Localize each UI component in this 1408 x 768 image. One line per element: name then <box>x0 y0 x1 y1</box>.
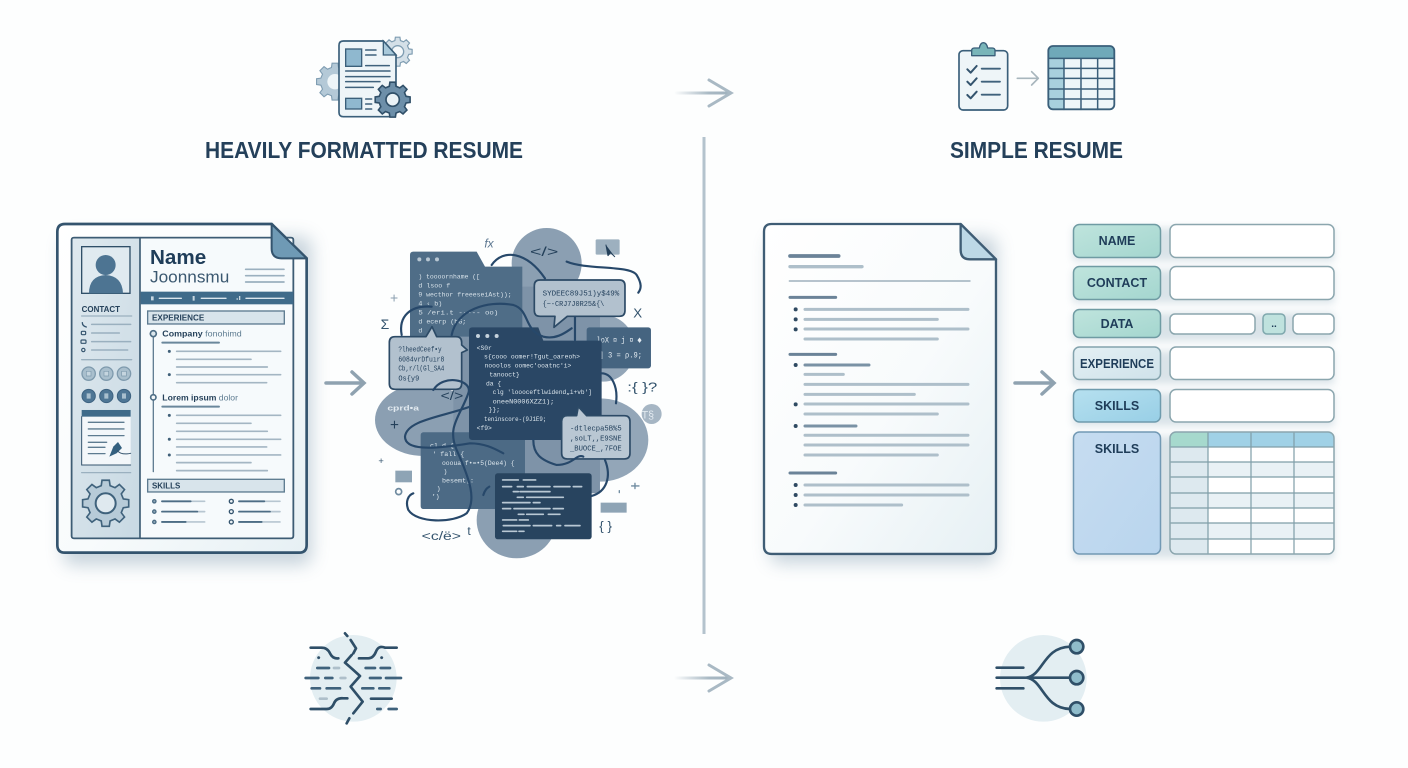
row: experience: EXPERIENCE <box>1080 357 1154 371</box>
code window: top left: d ecerp (bG; <box>418 317 466 325</box>
skill bars <box>153 499 280 524</box>
speech bubble: lower right: ,soLT‚,E9SNE <box>570 436 622 444</box>
blobs <box>375 228 662 558</box>
code window: centre: tanooct} <box>489 372 520 379</box>
heading lines <box>789 256 970 281</box>
contact list <box>81 323 131 352</box>
gear icon <box>83 480 129 526</box>
code window: bottom left: ) <box>437 485 441 493</box>
icon: checklist to table <box>959 43 1114 110</box>
speech bubble: top right <box>534 280 625 327</box>
contact band <box>141 292 293 304</box>
code window: top left: 4 ‹ b) <box>418 299 442 307</box>
tangled connector lines <box>401 255 641 520</box>
title: simple resume: SIMPLE RESUME <box>950 137 1123 163</box>
icon: document with gears <box>317 37 412 117</box>
code window: centre: }}; <box>489 407 500 414</box>
skills heading: SKILLS <box>152 481 181 491</box>
speech bubble: lower right: -dtlecpa5B%5 <box>570 426 622 434</box>
code window: bottom left: ’) <box>432 493 440 501</box>
experience heading: EXPERIENCE <box>152 313 205 323</box>
stray code symbols: </> <box>441 388 464 403</box>
code window: centre: da { <box>486 381 501 388</box>
icon: broken data lines <box>306 633 401 723</box>
stray code symbols: Σ <box>381 316 390 332</box>
name heading: Name <box>150 246 206 269</box>
code window: bottom left: ' fall { <box>432 450 464 458</box>
code window: top left: ) toooornhame ([ <box>418 272 480 280</box>
fold corner <box>272 224 307 258</box>
panel: simple resume document <box>764 224 997 563</box>
panel: tangled code chaos <box>375 228 662 558</box>
subtitle: Joonnsmu <box>150 268 229 286</box>
row: skills block label <box>1074 432 1160 554</box>
row: data <box>1074 310 1334 338</box>
row: experience <box>1074 347 1334 380</box>
row: contact: CONTACT <box>1087 276 1147 290</box>
section: summary bullets <box>790 297 968 339</box>
section: skills bullets <box>790 473 968 507</box>
code window: top left: d <box>418 326 422 334</box>
code window: bottom left <box>421 432 525 509</box>
arrow: resume to fields <box>1015 372 1054 394</box>
stray code symbols: t <box>467 524 471 538</box>
code window: centre: nooolos oomec'ooatnc'i> <box>485 363 572 370</box>
speech bubble: left <box>389 327 467 389</box>
code window: centre: clg 'loooceftlwidend„i+vb'] <box>493 389 592 396</box>
stray code symbols: cprd•a <box>387 404 420 413</box>
speech bubble: lower right: _BUOCE_,7FOE <box>569 446 622 454</box>
code window: top left <box>410 252 522 337</box>
code window: top left: 9 wecthor freeeseiAst)); <box>418 290 512 298</box>
code window: centre: oneeN0006XZZ1); <box>493 399 554 406</box>
speech bubble: left: Os{y9 <box>398 376 419 384</box>
stray code symbols: T§ <box>642 409 654 421</box>
contact heading: CONTACT <box>82 304 121 314</box>
code window: bottom left: cl d { <box>430 441 454 449</box>
code window: centre: <S0r <box>477 345 492 352</box>
table: skills grid <box>1170 432 1334 554</box>
stray code symbols: fx <box>484 236 495 250</box>
speech bubble: left: 6084vrDfuır8 <box>398 356 444 364</box>
speech bubble: left: ?lheedCeef•y <box>398 347 442 355</box>
title: heavily formatted resume: HEAVILY FORMATTED RESUME <box>205 137 523 163</box>
small code panel: right: loX ¤ j ¤ ◆ <box>597 336 642 346</box>
icon: branching flow <box>997 635 1087 722</box>
stray code symbols: </> <box>530 244 559 259</box>
icon row: dark circles <box>82 389 131 403</box>
photo placeholder <box>82 247 130 293</box>
arrow: bottom <box>675 665 731 691</box>
stray code symbols: <c/ё> <box>422 529 461 543</box>
arrow: top header <box>676 80 731 106</box>
code window: centre <box>469 327 602 440</box>
stray code symbols: X <box>633 306 642 321</box>
speech bubble: top right: {~-CRJ7J0R25&{\ <box>543 301 604 309</box>
section: experience bullets <box>790 354 968 455</box>
panel: formatted resume document <box>57 224 312 565</box>
stray code symbols <box>378 236 657 543</box>
code window: centre: <f9> <box>477 425 492 432</box>
code panel: bottom dark <box>495 473 592 539</box>
row: name <box>1074 224 1334 258</box>
speech bubble: lower right <box>562 407 630 459</box>
row: data: DATA <box>1101 317 1133 331</box>
code window: bottom left: oooua.f•=•5(Dee4) { <box>442 459 515 467</box>
row: skills: SKILLS <box>1095 399 1139 413</box>
icon row: light circles <box>82 367 131 380</box>
arrow: resume to code <box>326 372 364 394</box>
stray code symbols: + <box>378 456 384 466</box>
stray code symbols: + <box>390 290 398 306</box>
code window: centre: teninscore-(9J1E9; <box>484 416 546 423</box>
experience timeline: Company fonohimd <box>162 328 242 338</box>
skills heading <box>148 479 284 492</box>
stray code symbols: { } <box>599 519 612 534</box>
row: skills <box>1074 390 1334 422</box>
stray code symbols: + <box>390 417 399 434</box>
row: skills block label: SKILLS <box>1095 442 1139 456</box>
stray code symbols: :{ }? <box>627 381 657 395</box>
code window: top left: d lsoo f <box>418 281 450 289</box>
code window: bottom left: ) <box>443 467 447 475</box>
code window: bottom left: besemt|: <box>442 476 474 484</box>
experience timeline: Lorem ipsum dolor <box>162 392 238 402</box>
small code panel: right <box>587 327 651 368</box>
small code panel: right: ]] 3 = ρ.9; <box>595 350 642 360</box>
code window: centre: s{cooo oomer!Tgut_oareoh> <box>484 353 580 360</box>
row: contact <box>1074 266 1334 300</box>
experience timeline <box>150 328 281 472</box>
speech bubble: top right: SYDEEC89J51)y$49% <box>543 291 620 299</box>
speech bubble: left: Cb‚r/l(Gl_SA4 <box>398 366 444 374</box>
panel: structured fields <box>1073 224 1334 558</box>
mini document with pen <box>82 410 131 465</box>
code window: top left: 5 /eri.t ----- oo) <box>418 308 498 316</box>
fold corner <box>961 224 996 259</box>
experience heading <box>148 311 284 324</box>
row: data: .. <box>1271 319 1277 330</box>
row: name: NAME <box>1099 234 1135 248</box>
